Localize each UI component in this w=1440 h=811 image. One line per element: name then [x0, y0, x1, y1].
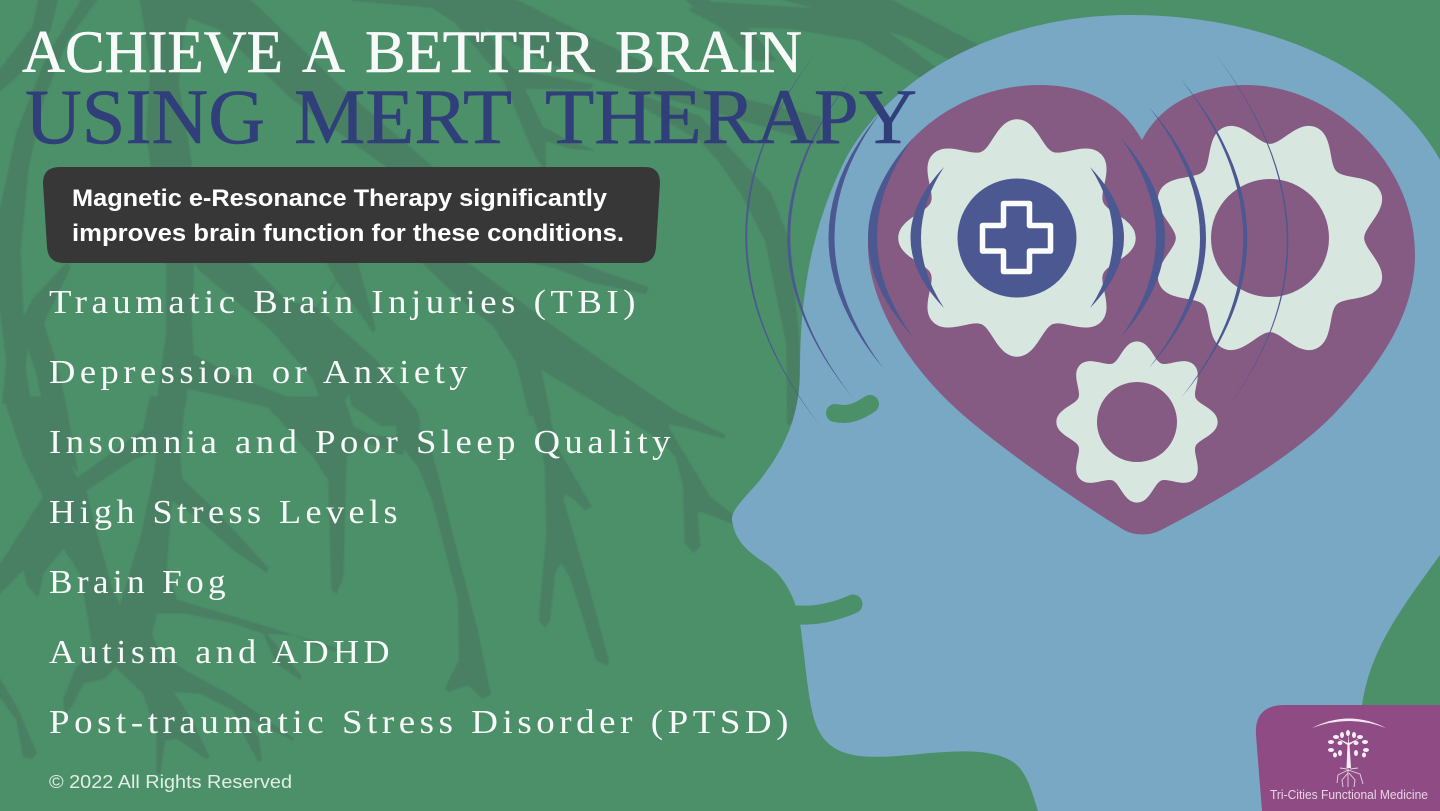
gear: right large — [1113, 81, 1427, 395]
copyright: © 2022 All Rights Reserved — [49, 772, 292, 792]
list of conditions: Post-traumatic Stress Disorder (PTSD) — [49, 704, 793, 741]
head silhouette — [732, 15, 1440, 811]
logo text: Tri-Cities Functional Medicine — [1270, 788, 1428, 802]
title line 2 — [25, 73, 917, 160]
title line 1: BRAIN — [615, 19, 802, 85]
icon: roots — [1337, 768, 1363, 787]
callout: improves brain function for these conditions. — [72, 220, 624, 247]
resonance waves: right — [1090, 52, 1288, 411]
title line 1: BETTER — [365, 19, 595, 85]
gear: main with medical cross — [898, 119, 1136, 357]
icon: tree — [1328, 730, 1369, 768]
title line 2: THERAPY — [545, 73, 917, 160]
callout — [43, 167, 660, 263]
callout: Magnetic e-Resonance Therapy significantly — [72, 185, 607, 212]
list of conditions: Autism and ADHD — [49, 634, 394, 671]
logo arc — [1312, 718, 1386, 728]
list of conditions: Brain Fog — [49, 564, 230, 601]
title — [22, 19, 917, 160]
list of conditions: Insomnia and Poor Sleep Quality — [49, 424, 675, 461]
title line 2: USING — [25, 73, 265, 160]
logo panel — [1256, 705, 1440, 811]
list of conditions: Traumatic Brain Injuries (TBI) — [49, 284, 640, 321]
list of conditions: High Stress Levels — [49, 494, 402, 531]
list of conditions: Depression or Anxiety — [49, 354, 472, 391]
resonance waves: left — [745, 53, 944, 427]
title line 1: A — [302, 19, 345, 85]
eye — [835, 404, 870, 414]
title line 2: MERT — [294, 73, 512, 160]
mouth — [797, 604, 853, 615]
title line 1 — [22, 19, 802, 85]
gear: small lower — [1056, 341, 1218, 503]
list of conditions — [49, 284, 793, 741]
title line 1: ACHIEVE — [22, 19, 283, 85]
icon: medical cross — [982, 204, 1050, 272]
heart — [868, 85, 1415, 534]
